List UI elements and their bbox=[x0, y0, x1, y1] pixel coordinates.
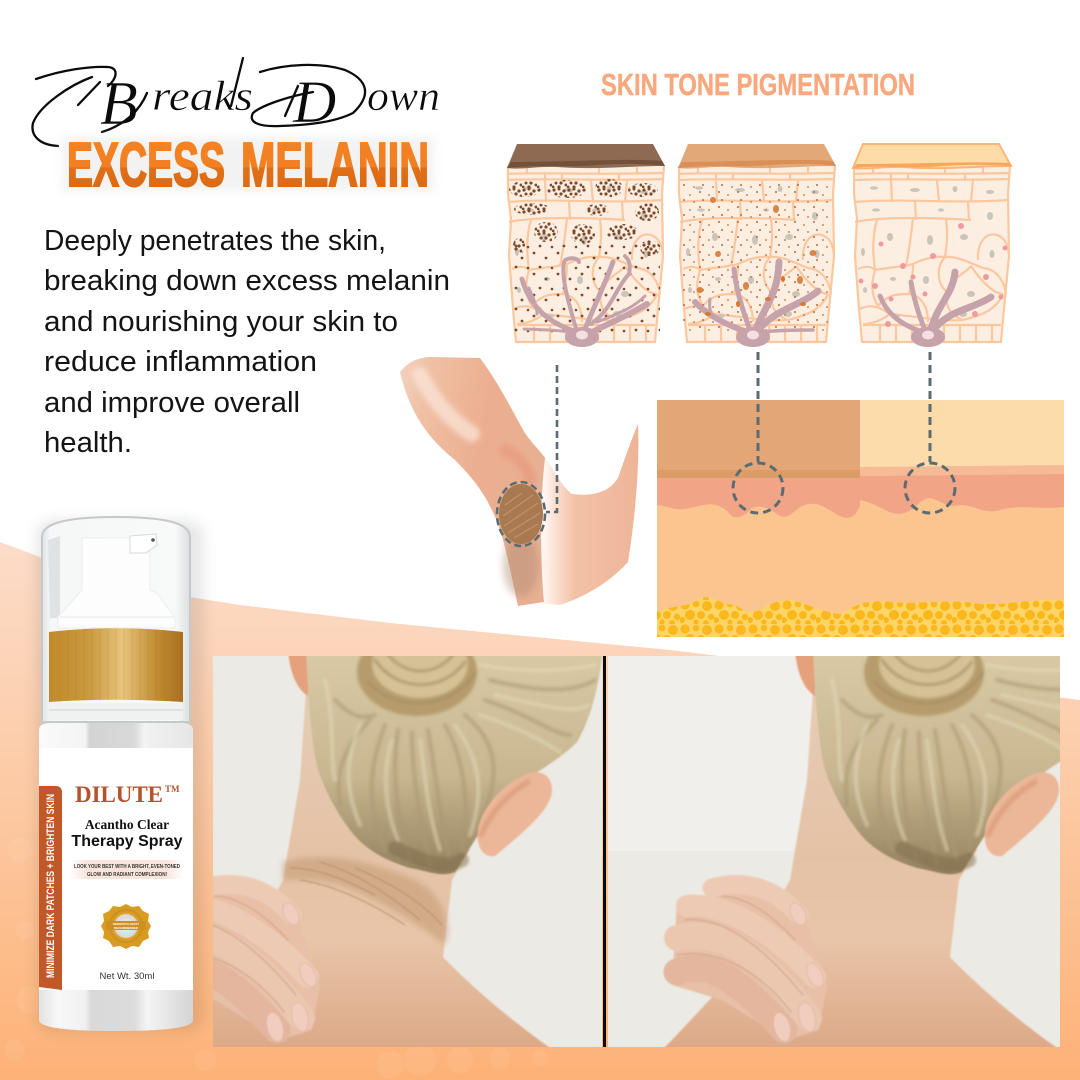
divider line bbox=[603, 656, 606, 1047]
dashed callout: light skin bbox=[905, 352, 955, 513]
before photo: pigmented neck bbox=[213, 656, 602, 1047]
title: EXCESS MELANIN: MELANIN bbox=[241, 131, 429, 200]
net weight: Net Wt. 30ml bbox=[100, 971, 154, 982]
layered skin cross-section bbox=[657, 400, 1064, 637]
clear cap bbox=[42, 517, 190, 722]
title: EXCESS MELANIN: EXCESS bbox=[67, 131, 225, 200]
tagline strip bbox=[70, 860, 183, 879]
bottle base bbox=[39, 990, 193, 1031]
body paragraph bbox=[44, 225, 450, 459]
dark underarm patch bbox=[499, 484, 543, 544]
seal badge: RECOMMENDED bbox=[114, 926, 139, 930]
swash strokes on script title bbox=[32, 58, 365, 146]
product name: Therapy Spray bbox=[71, 833, 183, 850]
seal badge: DERMATOLOGIST bbox=[113, 922, 139, 926]
body paragraph: breaking down excess melanin bbox=[44, 265, 450, 297]
product bottle bbox=[36, 517, 204, 1032]
seal badge bbox=[101, 904, 151, 949]
product name: Acantho Clear bbox=[85, 817, 169, 832]
orange background band bbox=[0, 542, 1080, 1080]
title: script heading: reaks bbox=[152, 74, 253, 120]
title: script heading bbox=[32, 58, 440, 146]
bottle shadow bbox=[36, 520, 204, 1032]
body paragraph: health. bbox=[44, 427, 132, 459]
tagline strip: LOOK YOUR BEST WITH A BRIGHT, EVEN-TONED bbox=[74, 864, 180, 870]
side label bbox=[39, 786, 62, 990]
pump bbox=[58, 538, 175, 628]
gold collar bbox=[49, 628, 183, 702]
title: script heading: own bbox=[367, 74, 440, 120]
brand name: TM bbox=[165, 784, 180, 794]
arm illustration bbox=[400, 357, 638, 606]
title: script heading: B bbox=[100, 70, 138, 138]
body paragraph: Deeply penetrates the skin, bbox=[44, 225, 386, 257]
body paragraph: and nourishing your skin to bbox=[44, 306, 398, 338]
bottle body bbox=[39, 748, 193, 993]
skin diagram: dark tone bbox=[507, 144, 665, 347]
dashed callout: medium skin bbox=[733, 352, 783, 513]
side label: MINIMIZE DARK PATCHES + BRIGHTEN SKIN bbox=[45, 794, 57, 978]
product name bbox=[71, 817, 183, 850]
heading: skin tone pigmentation: SKIN TONE PIGMENTATION bbox=[601, 67, 915, 102]
shoulder bbox=[39, 723, 193, 748]
decorative bokeh dots bbox=[5, 838, 548, 1079]
skin diagram: medium tone bbox=[678, 144, 836, 347]
tagline strip: GLOW AND RADIANT COMPLEXION! bbox=[87, 872, 167, 878]
body paragraph: and improve overall bbox=[44, 387, 300, 419]
title: script heading: D bbox=[278, 69, 336, 135]
title: EXCESS MELANIN bbox=[62, 131, 434, 200]
skin diagram: light tone bbox=[853, 144, 1011, 347]
after photo: clear neck bbox=[608, 656, 1060, 1047]
brand name: DILUTE bbox=[75, 782, 163, 807]
dashed callout: armpit bbox=[497, 365, 557, 546]
body paragraph: reduce inflammation bbox=[44, 346, 317, 378]
